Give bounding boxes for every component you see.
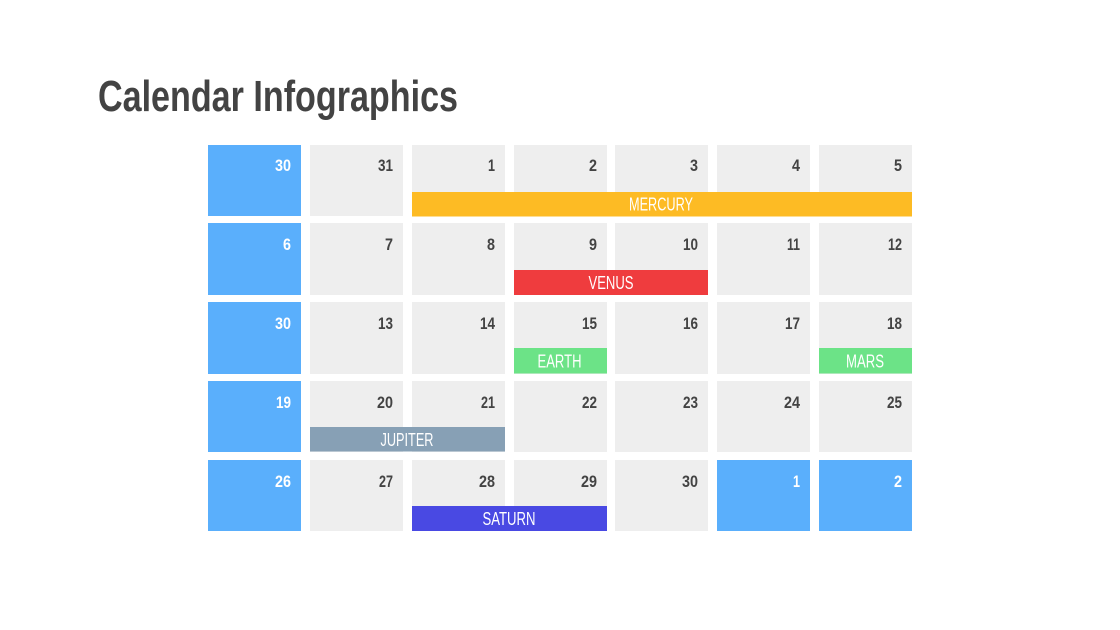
- day 1 (next month): [717, 460, 810, 531]
- day 19: [208, 381, 301, 452]
- event bar: Earth: EARTH: [538, 352, 582, 372]
- day 21: 21: [481, 393, 495, 412]
- day 24: [717, 381, 810, 452]
- day 2 (next month): [819, 460, 912, 531]
- day 5: [819, 145, 912, 216]
- day 30: [615, 460, 708, 531]
- day 9: 9: [589, 235, 597, 254]
- day 1: [412, 145, 505, 216]
- day 12: [819, 223, 912, 295]
- day 30 (week 3 start): [208, 302, 301, 374]
- week 3: [208, 302, 912, 374]
- day 17: 17: [785, 314, 800, 333]
- event bar: Mercury: MERCURY: [629, 194, 693, 214]
- event bar: Venus: VENUS: [588, 273, 634, 293]
- day 22: [514, 381, 607, 452]
- day 26: 26: [275, 472, 291, 491]
- day 23: 23: [683, 393, 698, 412]
- day 4: 4: [792, 156, 800, 175]
- event bar: Saturn: SATURN: [482, 509, 536, 529]
- day 13: [310, 302, 403, 374]
- day 2: 2: [589, 156, 597, 175]
- day 9: [514, 223, 607, 295]
- week 2: [208, 223, 912, 295]
- event bar: Mars: MARS: [846, 352, 884, 372]
- day 6: [208, 223, 301, 295]
- day 4: [717, 145, 810, 216]
- title: Calendar Infographics: [98, 72, 458, 121]
- day 10: [615, 223, 708, 295]
- day 1 (next month): 1: [793, 472, 800, 491]
- day 21: [412, 381, 505, 452]
- calendar grid: [208, 145, 912, 531]
- day 16: [615, 302, 708, 374]
- day 15: 15: [582, 314, 597, 333]
- day 8: [412, 223, 505, 295]
- day 30 (week 3 start): 30: [275, 314, 291, 333]
- day 8: 8: [487, 235, 495, 254]
- week 5: [208, 460, 912, 531]
- day 30: 30: [682, 472, 698, 491]
- day 30 (previous month): [208, 145, 301, 216]
- day 13: 13: [378, 314, 393, 333]
- day 22: 22: [582, 393, 597, 412]
- day 11: [717, 223, 810, 295]
- day 29: 29: [581, 472, 597, 491]
- day 15: [514, 302, 607, 374]
- day 27: [310, 460, 403, 531]
- week 1: [208, 145, 912, 216]
- day 18: [819, 302, 912, 374]
- day 24: 24: [784, 393, 800, 412]
- day 12: 12: [888, 235, 902, 254]
- day 28: [412, 460, 505, 531]
- day 5: 5: [894, 156, 902, 175]
- day 30 (previous month): 30: [275, 156, 291, 175]
- day 6: 6: [283, 235, 291, 254]
- day 2 (next month): 2: [894, 472, 902, 491]
- day 3: 3: [690, 156, 698, 175]
- day 26: [208, 460, 301, 531]
- day 16: 16: [683, 314, 698, 333]
- event bar: Earth: [514, 348, 607, 374]
- day 7: [310, 223, 403, 295]
- day 31: [310, 145, 403, 216]
- day 18: 18: [887, 314, 902, 333]
- day 17: [717, 302, 810, 374]
- event bar: Jupiter: JUPITER: [380, 430, 434, 450]
- event bar: Saturn: [412, 506, 607, 531]
- day 3: [615, 145, 708, 216]
- day 25: 25: [887, 393, 902, 412]
- day 25: [819, 381, 912, 452]
- day 14: 14: [480, 314, 495, 333]
- day 27: 27: [379, 472, 393, 491]
- day 23: [615, 381, 708, 452]
- day 28: 28: [479, 472, 495, 491]
- day 11: 11: [787, 235, 800, 254]
- day 31: 31: [378, 156, 393, 175]
- day 20: [310, 381, 403, 452]
- day 19: 19: [276, 393, 291, 412]
- day 1: 1: [488, 156, 495, 175]
- day 7: 7: [385, 235, 393, 254]
- event bar: Venus: [514, 270, 708, 295]
- day 2: [514, 145, 607, 216]
- day 20: 20: [377, 393, 393, 412]
- event bar: Mars: [819, 348, 912, 374]
- day 14: [412, 302, 505, 374]
- event bar: Jupiter: [310, 427, 505, 452]
- day 10: 10: [683, 235, 698, 254]
- week 4: [208, 381, 912, 452]
- event bar: Mercury: [412, 192, 912, 216]
- day 29: [514, 460, 607, 531]
